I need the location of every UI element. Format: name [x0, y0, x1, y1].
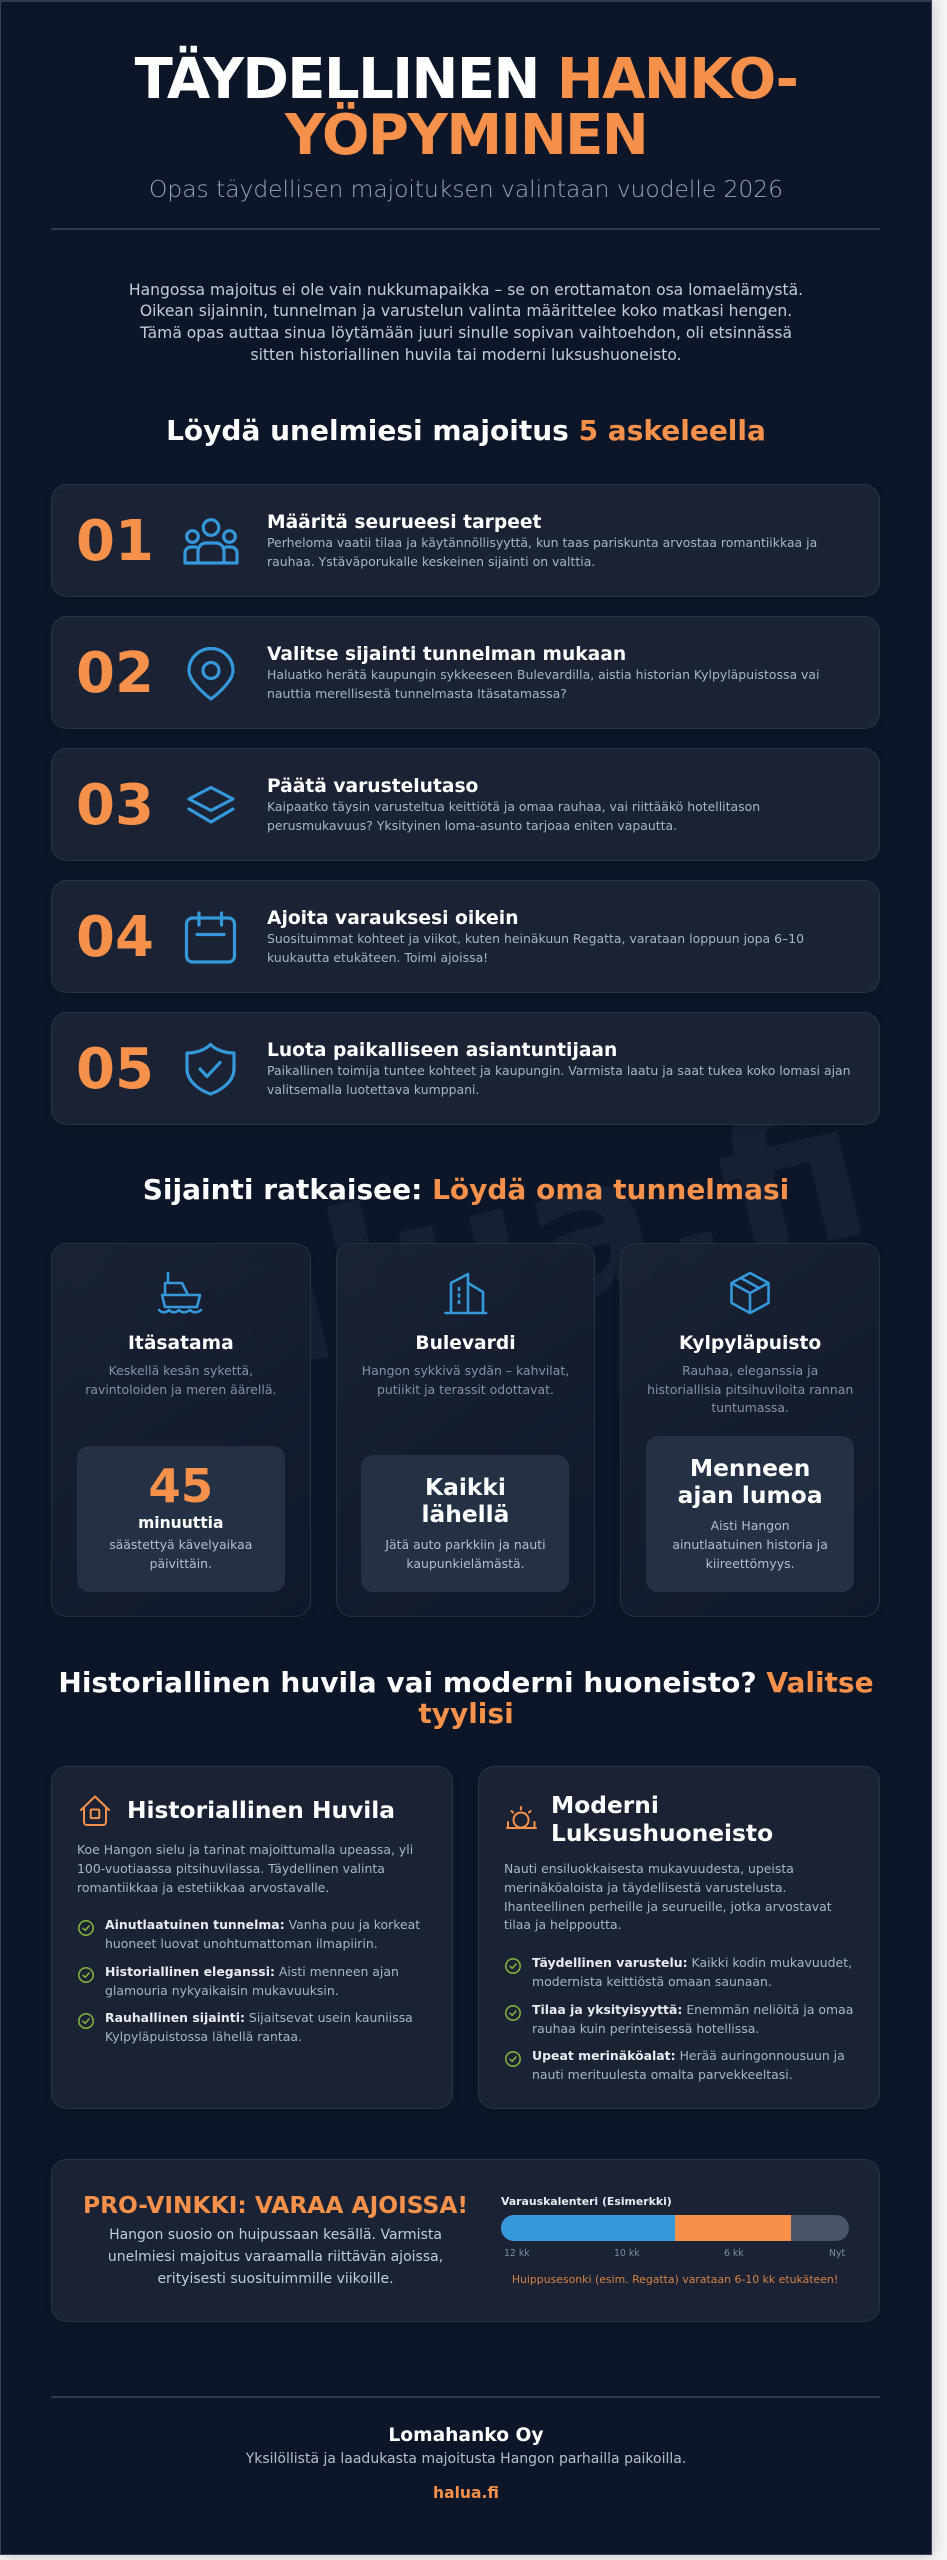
step description: Kaipaatko täysin varusteltua keittiötä ja omaa rauhaa, vai riittääkö hotellitason — [267, 799, 760, 814]
chart note: Huippusesonki (esim. Regatta) varataan 6-10 kk etukäteen! — [512, 2273, 838, 2286]
subtitle: Opas täydellisen majoituksen valintaan vuodelle 2026 — [149, 175, 783, 203]
icon: house — [80, 1796, 110, 1826]
icon: shield check — [185, 1042, 236, 1096]
highlight heading: lähellä — [422, 1500, 509, 1528]
location description: Rauhaa, eleganssia ja — [682, 1363, 818, 1378]
list item: nauti merituulesta omalta parvekkeeltasi. — [532, 2067, 793, 2082]
highlight caption — [672, 1518, 828, 1571]
list item: huoneet luovat unohtumattoman ilmapiirin. — [105, 1936, 378, 1951]
highlight heading — [678, 1454, 823, 1509]
highlight caption: Jätä auto parkkiin ja nauti — [385, 1537, 546, 1552]
list item — [532, 2047, 845, 2085]
watermark: halua.fi — [44, 1057, 887, 1458]
heading: style comparison: tyylisi — [418, 1697, 514, 1730]
stat box: 45 minutes — [77, 1446, 285, 1592]
location description — [362, 1363, 569, 1397]
card title: Luksushuoneisto — [551, 1819, 773, 1847]
highlight box: everything nearby — [361, 1455, 569, 1592]
company name: Lomahanko Oy — [388, 2424, 544, 2446]
tip text: erityisesti suosituimmille viikoille. — [157, 2271, 394, 2287]
card title: Historiallinen Huvila — [127, 1796, 395, 1824]
highlight caption: ainutlaatuinen historia ja — [672, 1537, 828, 1552]
location description: tuntumassa. — [711, 1400, 789, 1415]
website: halua.fi — [433, 2484, 499, 2502]
list item: Kylpyläpuistossa lähellä rantaa. — [105, 2029, 302, 2044]
timeline bar — [501, 2215, 849, 2241]
highlight heading: Kaikki — [425, 1473, 506, 1501]
location name: Bulevardi — [415, 1332, 516, 1354]
location description: ravintoloiden ja meren äärellä. — [85, 1382, 276, 1397]
chart: booking calendar — [501, 2189, 849, 2299]
icon: buildings — [444, 1272, 488, 1314]
check icon — [505, 2051, 521, 2067]
heading: locations: Sijainti ratkaisee: Löydä oma tunnelmasi — [143, 1173, 789, 1206]
highlight caption: kiireettömyys. — [706, 1556, 795, 1571]
stat caption — [109, 1537, 252, 1571]
step description: Haluatko herätä kaupungin sykkeeseen Bulevardilla, aistia historian Kylpyläpuistossa vai — [267, 667, 819, 682]
step number 02: 02 — [76, 641, 154, 706]
location description — [647, 1363, 853, 1415]
timeline ticks: 6 kk — [724, 2248, 744, 2259]
highlight caption: kaupunkielämästä. — [406, 1556, 525, 1571]
card description: tilaa ja helppoutta. — [504, 1917, 622, 1932]
timeline ticks: 12 kk — [504, 2248, 530, 2259]
stat number: 45 — [148, 1460, 213, 1514]
tip text — [51, 2225, 500, 2291]
title: YÖPYMINEN — [285, 102, 647, 168]
step title: Valitse sijainti tunnelman mukaan — [267, 644, 626, 664]
intro text: Oikean sijainnin, tunnelman ja varustelun valinta määrittelee koko matkasi hengen. — [140, 302, 792, 320]
panel: step 5 — [51, 1012, 880, 1125]
heading: style comparison: Historiallinen huvila vai moderni huoneisto? Valitse — [58, 1666, 874, 1699]
highlight heading — [422, 1473, 509, 1528]
step title: Luota paikalliseen asiantuntijaan — [267, 1040, 617, 1060]
list item — [532, 2001, 853, 2039]
highlight caption — [384, 1537, 546, 1571]
location description: historiallisia pitsihuviloita rannan — [647, 1382, 853, 1397]
panel: Itäsatama — [51, 1243, 311, 1617]
tip text: Hangon suosio on huipussaan kesällä. Varmista — [109, 2227, 442, 2243]
step description — [267, 799, 760, 833]
step description — [267, 1063, 851, 1097]
stat caption: säästettyä kävelyaikaa — [109, 1537, 252, 1552]
list item: glamouria nykyaikaisin mukavuuksin. — [105, 1983, 339, 1998]
list item: Upeat merinäköalat: Herää auringonnousuun ja — [532, 2048, 845, 2063]
icon: box — [730, 1272, 770, 1314]
check icon — [78, 2013, 94, 2029]
card description — [77, 1842, 413, 1895]
card description: merinäköaloista ja täydellisestä varustelusta. — [504, 1880, 786, 1895]
tip text: unelmiesi majoitus varaamalla riittävän ajoissa, — [108, 2249, 443, 2265]
step description: Paikallinen toimija tuntee kohteet ja kaupungin. Varmista laatu ja saat tukea koko lomasi ajan — [267, 1063, 851, 1078]
highlight box: old-time charm — [646, 1436, 854, 1592]
card title — [551, 1791, 773, 1847]
step number 04: 04 — [76, 905, 154, 970]
icon: boat — [158, 1272, 202, 1314]
list item — [105, 1964, 399, 1998]
icon: map pin — [187, 646, 235, 701]
step number 01: 01 — [76, 509, 154, 574]
title — [134, 46, 797, 168]
heading: style comparison — [58, 1666, 874, 1730]
location description: Hangon sykkivä sydän – kahvilat, — [362, 1363, 569, 1378]
check icon — [78, 1967, 94, 1983]
step title: Päätä varustelutaso — [267, 776, 478, 796]
step description — [267, 931, 804, 965]
highlight heading: Menneen — [690, 1454, 810, 1482]
list item — [105, 1917, 420, 1951]
location name: Kylpyläpuisto — [679, 1332, 821, 1354]
list item: Rauhallinen sijainti: Sijaitsevat usein kauniissa — [105, 2010, 413, 2025]
location description: putiikit ja terassit odottavat. — [377, 1382, 554, 1397]
panel: historic villa — [51, 1766, 453, 2109]
icon: group of people — [183, 518, 239, 565]
timeline ticks — [501, 2247, 849, 2259]
card title: Moderni — [551, 1791, 659, 1819]
tagline: Yksilöllistä ja laadukasta majoitusta Hangon parhailla paikoilla. — [246, 2451, 686, 2467]
footer — [0, 2420, 932, 2510]
card description: romantiikkaa ja estetiikkaa arvostavalle. — [77, 1880, 329, 1895]
list item: rauhaa kuin perinteisessä hotellissa. — [532, 2021, 759, 2036]
heading: steps: Löydä unelmiesi majoitus 5 askeleella — [166, 414, 766, 447]
panel: step 3 — [51, 748, 880, 861]
stat unit: minuuttia — [138, 1514, 224, 1532]
timeline ticks: Nyt — [829, 2248, 845, 2259]
step title: Ajoita varauksesi oikein — [267, 908, 518, 928]
step title: Määritä seurueesi tarpeet — [267, 512, 541, 532]
step description: kuukautta etukäteen. Toimi ajoissa! — [267, 950, 488, 965]
intro text — [129, 281, 803, 364]
step description: Suosituimmat kohteet ja viikot, kuten heinäkuun Regatta, varataan loppuun jopa 6–10 — [267, 931, 804, 946]
panel: pro tip — [51, 2159, 880, 2322]
location description: Keskellä kesän sykettä, — [109, 1363, 253, 1378]
highlight caption: Aisti Hangon — [711, 1518, 790, 1533]
check icon — [505, 2005, 521, 2021]
panel: step 1 — [51, 484, 880, 597]
intro text: sitten historiallinen huvila tai moderni luksushuoneisto. — [250, 346, 682, 364]
chart label: Varauskalenteri (Esimerkki) — [501, 2195, 672, 2208]
intro text: Hangossa majoitus ei ole vain nukkumapaikka – se on erottamaton osa lomaelämystä. — [129, 281, 803, 299]
list item: Täydellinen varustelu: Kaikki kodin mukavuudet, — [532, 1955, 852, 1970]
list item: modernista keittiöstä omaan saunaan. — [532, 1974, 772, 1989]
check icon — [78, 1920, 94, 1936]
card description: Ihanteellinen perheille ja seurueille, jotka arvostavat — [504, 1899, 832, 1914]
list item: Tilaa ja yksityisyyttä: Enemmän neliöitä ja omaa — [532, 2002, 853, 2017]
tip heading: PRO-VINKKI: VARAA AJOISSA! — [83, 2191, 468, 2219]
step description — [267, 535, 817, 569]
card description: 100-vuotiaassa pitsihuvilassa. Täydellinen valinta — [77, 1861, 385, 1876]
title: TÄYDELLINEN HANKO- — [135, 46, 797, 112]
location name: Itäsatama — [128, 1332, 234, 1354]
list item — [105, 2010, 413, 2044]
step description — [267, 667, 819, 701]
panel: step 4 — [51, 880, 880, 993]
check icon — [505, 1958, 521, 1974]
stat caption: päivittäin. — [150, 1556, 212, 1571]
timeline ticks: 10 kk — [614, 2248, 640, 2259]
panel: Kylpyläpuisto — [620, 1243, 880, 1617]
list item — [532, 1955, 852, 1989]
card description: Koe Hangon sielu ja tarinat majoittumalla upeassa, yli — [77, 1842, 413, 1857]
list item: Ainutlaatuinen tunnelma: Vanha puu ja korkeat — [105, 1917, 420, 1932]
card description — [504, 1861, 832, 1932]
step description: valitsemalla luotettava kumppani. — [267, 1082, 479, 1097]
location description — [85, 1363, 276, 1397]
step description: Perheloma vaatii tilaa ja käytännöllisyyttä, kun taas pariskunta arvostaa romantiikkaa ja — [267, 535, 817, 550]
step description: rauhaa. Ystäväporukalle keskeinen sijainti on valttia. — [267, 554, 595, 569]
step number 05: 05 — [76, 1037, 154, 1102]
list item: Historiallinen eleganssi: Aisti menneen ajan — [105, 1964, 399, 1979]
panel: modern apartment — [478, 1766, 880, 2109]
highlight heading: ajan lumoa — [678, 1481, 823, 1509]
icon: sunrise — [506, 1806, 537, 1829]
step number 03: 03 — [76, 773, 154, 838]
panel: Bulevardi — [336, 1243, 595, 1617]
panel: step 2 — [51, 616, 880, 729]
step description: perusmukavuus? Yksityinen loma-asunto tarjoaa eniten vapautta. — [267, 818, 677, 833]
card description: Nauti ensiluokkaisesta mukavuudesta, upeista — [504, 1861, 794, 1876]
icon: layers — [187, 786, 235, 824]
icon: calendar — [184, 911, 236, 964]
step description: nauttia merellisestä tunnelmasta Itäsatamassa? — [267, 686, 567, 701]
intro text: Tämä opas auttaa sinua löytämään juuri sinulle sopivan vaihtoehdon, oli etsinnässä — [140, 324, 792, 342]
